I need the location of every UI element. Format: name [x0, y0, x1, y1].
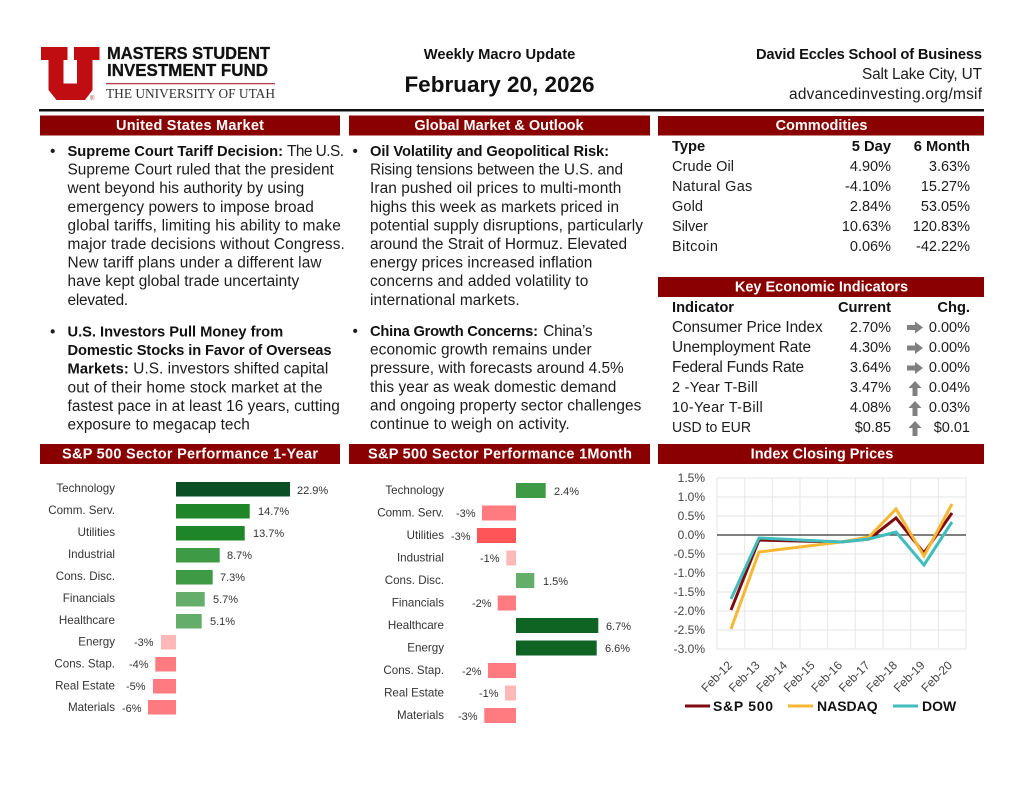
panel: Key Economic Indicators: [658, 277, 984, 436]
table: indicators: 3.64%: [850, 360, 891, 376]
bar chart: 1-month sector performance: Real Estate: [384, 686, 444, 700]
line chart: index closing prices: -3.0%: [674, 642, 705, 656]
line chart: index closing prices: Feb-17: [836, 658, 873, 695]
bar chart: 1-year sector performance: Healthcare: [59, 614, 115, 627]
bar chart: 1-year sector performance: Financials: [63, 592, 115, 605]
legend: [685, 698, 957, 714]
legend: NASDAQ: [817, 698, 878, 714]
table: indicators: Consumer Price Index: [672, 319, 823, 336]
bar chart: 1-year sector performance: 13.7%: [253, 528, 284, 540]
text block: US market bullets: [50, 143, 345, 434]
bar chart: 1-month sector performance: Healthcare: [388, 619, 444, 632]
heading: sector performance 1 month: S&P 500 Sector Performance 1Month: [368, 446, 632, 462]
legend: S&P 500: [713, 698, 773, 714]
text block: US market bullets: fastest pace in at least 16 years, cutting: [68, 398, 340, 415]
icon: change arrows: [907, 322, 923, 436]
text block: global bullets: pressure, with forecasts around 4.5%: [370, 360, 624, 377]
bar chart: 1-month sector performance: 6.7%: [606, 621, 631, 633]
text block: US market bullets: Domestic Stocks in Favor of Overseas: [68, 343, 332, 359]
table: indicators: USD to EUR: [672, 420, 751, 436]
text block: global bullets: China’s: [543, 323, 593, 340]
text block: US market bullets: Supreme Court Tariff Decision:: [68, 144, 283, 160]
table: indicators: 3.47%: [850, 380, 891, 396]
line chart: index closing prices: Feb-14: [753, 658, 790, 695]
line chart: index closing prices: -1.0%: [674, 566, 705, 580]
heading: sector performance 1-year: S&P 500 Sector Performance 1-Year: [62, 446, 318, 462]
text block: global bullets: Oil Volatility and Geopolitical Risk:: [370, 144, 609, 160]
line chart: index closing prices: -2.5%: [674, 623, 705, 637]
logo: University of Utah Masters Student Investment Fund: ®: [90, 95, 95, 102]
table: indicators: 2.70%: [850, 320, 891, 336]
table: indicators: 4.08%: [850, 400, 891, 416]
text block: US market bullets: have kept global trade uncertainty: [68, 273, 299, 290]
table: indicators: 2 -Year T-Bill: [672, 380, 758, 396]
table: commodities: -42.22%: [916, 239, 970, 255]
table: indicators: Unemployment Rate: [672, 339, 811, 356]
line chart: index closing prices: 1.0%: [678, 490, 705, 504]
table: indicators: $0.01: [934, 420, 970, 436]
table: indicators: Indicator: [672, 300, 734, 316]
text block: US market bullets: New tariff plans under a different law: [68, 255, 322, 272]
text block: US market bullets: •: [50, 324, 55, 340]
text block: global bullets: highs this week as markets priced in: [370, 199, 619, 216]
bar chart: 1-month sector performance: -2%: [472, 598, 492, 610]
text block: global bullets: this year as weak domestic demand: [370, 379, 616, 396]
text block: US market bullets: The U.S.: [287, 143, 344, 160]
table: indicators: 10-Year T-Bill: [672, 400, 763, 416]
table: commodities: 15.27%: [921, 179, 970, 195]
legend: DOW: [922, 698, 957, 714]
table: indicators: 4.30%: [850, 340, 891, 356]
line chart: index closing prices: 1.5%: [678, 471, 705, 485]
text block: global bullets: around the Strait of Hormuz. Elevated: [370, 236, 627, 253]
panel: Index Closing Prices: [658, 444, 984, 714]
bar chart: 1-month sector performance: 6.6%: [605, 643, 630, 655]
table: commodities: -4.10%: [845, 179, 891, 195]
bar chart: 1-year sector performance: 7.3%: [220, 572, 245, 584]
bar chart: 1-year sector performance: 8.7%: [227, 550, 252, 562]
table: indicators: 0.00%: [929, 360, 970, 376]
line chart: index closing prices: Feb-13: [726, 658, 763, 695]
text block: global bullets: concerns and added volatility to: [370, 273, 588, 290]
table: commodities: 5 Day: [852, 139, 892, 155]
bar chart: 1-year sector performance: 22.9%: [297, 485, 328, 497]
panel: United States Market: [40, 116, 345, 434]
title: weekly update and date: [404, 47, 595, 97]
text block: global bullets: economic growth remains under: [370, 342, 592, 359]
logo: University of Utah Masters Student Investment Fund: THE UNIVERSITY OF UTAH: [106, 86, 275, 101]
bar chart: 1-year sector performance: Technology: [56, 482, 115, 495]
title: weekly update and date: Weekly Macro Update: [424, 47, 575, 63]
line chart: index closing prices: Feb-15: [781, 658, 818, 695]
heading: Key Economic Indicators: [658, 277, 984, 297]
table: indicators: 0.00%: [929, 340, 970, 356]
line chart: index closing prices: Feb-12: [698, 658, 735, 695]
panel: Global Market & Outlook: [349, 116, 650, 433]
text block: US market bullets: Markets:: [68, 362, 129, 378]
bar chart: 1-year sector performance: -4%: [129, 659, 149, 671]
table: commodities: Gold: [672, 199, 703, 215]
bar chart: 1-month sector performance: -3%: [451, 531, 471, 543]
text block: global bullets: China Growth Concerns:: [370, 324, 538, 340]
logo: University of Utah Masters Student Investment Fund: MASTERS STUDENT: [107, 43, 270, 63]
heading: sector performance 1-year: [40, 444, 340, 464]
table: commodities: Type: [672, 139, 705, 155]
line chart: index closing prices: [674, 471, 966, 695]
bar chart: 1-month sector performance: -1%: [480, 553, 500, 565]
bar chart: 1-month sector performance: Cons. Stap.: [383, 664, 444, 677]
bar chart: 1-month sector performance: Cons. Disc.: [385, 574, 444, 587]
bar chart: 1-year sector performance: Industrial: [68, 548, 115, 561]
text block: global bullets: international markets.: [370, 292, 520, 309]
school contact block: Salt Lake City, UT: [862, 66, 983, 83]
text block: global bullets: Rising tensions between the U.S. and: [370, 162, 623, 179]
bar chart: 1-year sector performance: Cons. Stap.: [54, 658, 115, 670]
table: commodities: Natural Gas: [672, 179, 752, 195]
heading: Global Market & Outlook: [349, 116, 650, 136]
bar chart: 1-year sector performance: 5.7%: [213, 594, 238, 606]
bar chart: 1-year sector performance: -3%: [134, 637, 154, 649]
table: commodities: 10.63%: [842, 219, 891, 235]
text block: US market bullets: exposure to megacap tech: [68, 416, 250, 434]
bar chart: 1-year sector performance: -6%: [122, 703, 142, 715]
text block: global bullets: energy prices increased inflation: [370, 255, 592, 272]
bar chart: 1-month sector performance: [377, 483, 631, 723]
heading: United States Market: [40, 116, 340, 136]
table: indicators: $0.85: [855, 420, 891, 436]
text block: global bullets: and ongoing property sector challenges: [370, 397, 642, 414]
bar chart: 1-year sector performance: -5%: [126, 681, 146, 693]
table: indicators: 0.00%: [929, 320, 970, 336]
line chart: index closing prices: Feb-20: [918, 658, 955, 695]
table: indicators: Chg.: [937, 300, 970, 316]
table: commodities: 2.84%: [850, 199, 891, 215]
bar chart: 1-month sector performance: -1%: [479, 688, 499, 700]
bar chart: 1-year sector performance: Materials: [68, 701, 115, 714]
bar chart: 1-month sector performance: Technology: [385, 484, 444, 497]
line chart: index closing prices: 0.5%: [678, 509, 705, 523]
table: commodities: 120.83%: [913, 219, 970, 235]
school contact block: [756, 47, 983, 103]
text block: global bullets: continue to weigh on activity.: [370, 416, 570, 433]
text block: US market bullets: U.S. investors shifted capital: [133, 361, 328, 378]
bar chart: 1-month sector performance: -3%: [456, 508, 476, 520]
bar chart: 1-month sector performance: 2.4%: [554, 486, 579, 498]
line chart: index closing prices: Feb-16: [808, 658, 845, 695]
panel: Commodities table: [658, 116, 984, 255]
logo: University of Utah Masters Student Investment Fund: INVESTMENT FUND: [107, 60, 268, 80]
bar chart: 1-year sector performance: 14.7%: [258, 506, 289, 518]
text block: US market bullets: emergency powers to impose broad: [68, 199, 314, 216]
text block: US market bullets: •: [50, 143, 55, 160]
table: indicators: 0.03%: [929, 400, 970, 416]
panel: S&P 500 Sector Performance 1 Month: [349, 444, 650, 723]
text block: US market bullets: out of their home stock market at the: [68, 379, 322, 396]
table: indicators: Current: [838, 300, 891, 316]
bar chart: 1-month sector performance: Energy: [407, 642, 444, 654]
bar chart: 1-month sector performance: Financials: [392, 596, 444, 610]
bar chart: 1-year sector performance: Real Estate: [55, 680, 115, 692]
text block: US market bullets: U.S. Investors Pull Money from: [68, 324, 283, 340]
logo: University of Utah Masters Student Investment Fund: [41, 43, 275, 102]
table: commodities: 6 Month: [914, 139, 970, 155]
line chart: index closing prices: -0.5%: [674, 547, 705, 561]
table: indicators: Federal Funds Rate: [672, 359, 804, 376]
table: commodities: 0.06%: [850, 239, 891, 255]
heading: Commodities: Commodities: [776, 118, 867, 134]
bar chart: 1-year sector performance: Comm. Serv.: [48, 504, 115, 517]
table: commodities: Bitcoin: [672, 239, 718, 255]
heading: United States Market: United States Market: [116, 118, 264, 134]
text block: US market bullets: Supreme Court ruled that the president: [68, 162, 335, 179]
table: commodities: [672, 139, 970, 255]
title: weekly update and date: February 20, 2026: [404, 72, 595, 97]
table: commodities: 4.90%: [850, 159, 891, 175]
table: commodities: 53.05%: [921, 199, 970, 215]
heading: Key Economic Indicators: Key Economic Indicators: [735, 280, 908, 296]
text block: US market bullets: went beyond his authority by using: [66, 180, 304, 197]
school contact block: David Eccles School of Business: [756, 47, 982, 63]
text block: US market bullets: global tariffs, limiting his ability to make: [68, 217, 341, 234]
table: indicators: 0.04%: [929, 380, 970, 396]
heading: Index Closing Prices: [658, 444, 984, 464]
text block: global bullets: •: [352, 143, 358, 160]
bar chart: 1-year sector performance: Energy: [78, 636, 115, 648]
heading: Index Closing Prices: Index Closing Prices: [751, 446, 893, 462]
table: indicators: [672, 300, 970, 436]
bar chart: 1-year sector performance: 5.1%: [210, 616, 235, 628]
line chart: index closing prices: -2.0%: [674, 604, 705, 618]
line chart: index closing prices: -1.5%: [674, 585, 705, 599]
heading: Commodities: [658, 116, 984, 136]
line chart: index closing prices: Feb-19: [891, 658, 928, 695]
table: commodities: Silver: [672, 219, 708, 235]
bar chart: 1-month sector performance: -2%: [462, 666, 482, 678]
bar chart: 1-month sector performance: Utilities: [407, 529, 444, 542]
table: commodities: 3.63%: [929, 159, 970, 175]
text block: global bullets: •: [352, 323, 358, 340]
bar chart: 1-month sector performance: -3%: [458, 711, 478, 723]
table: commodities: Crude Oil: [672, 159, 734, 175]
text block: US market bullets: major trade decisions without Congress.: [68, 236, 345, 253]
bar chart: 1-year sector performance: Cons. Disc.: [56, 570, 115, 583]
school contact block: advancedinvesting.org/msif: [789, 86, 983, 103]
heading: Global Market & Outlook: Global Market & Outlook: [414, 118, 585, 134]
panel: S&P 500 Sector Performance 1-Year: [40, 444, 340, 715]
text block: US market bullets: elevated.: [68, 292, 128, 309]
text block: global bullets: potential supply disruptions, particularly: [370, 217, 643, 234]
text block: global bullets: Iran pushed oil prices to multi-month: [370, 180, 621, 197]
text block: global bullets: [352, 143, 643, 433]
bar chart: 1-month sector performance: Industrial: [397, 552, 444, 564]
bar chart: 1-month sector performance: 1.5%: [543, 576, 568, 588]
bar chart: 1-month sector performance: Materials: [397, 709, 444, 722]
bar chart: 1-year sector performance: Utilities: [78, 526, 115, 539]
line chart: index closing prices: Feb-18: [863, 658, 900, 695]
bar chart: 1-year sector performance: [48, 482, 328, 715]
line chart: index closing prices: 0.0%: [678, 528, 705, 542]
bar chart: 1-month sector performance: Comm. Serv.: [377, 506, 444, 520]
